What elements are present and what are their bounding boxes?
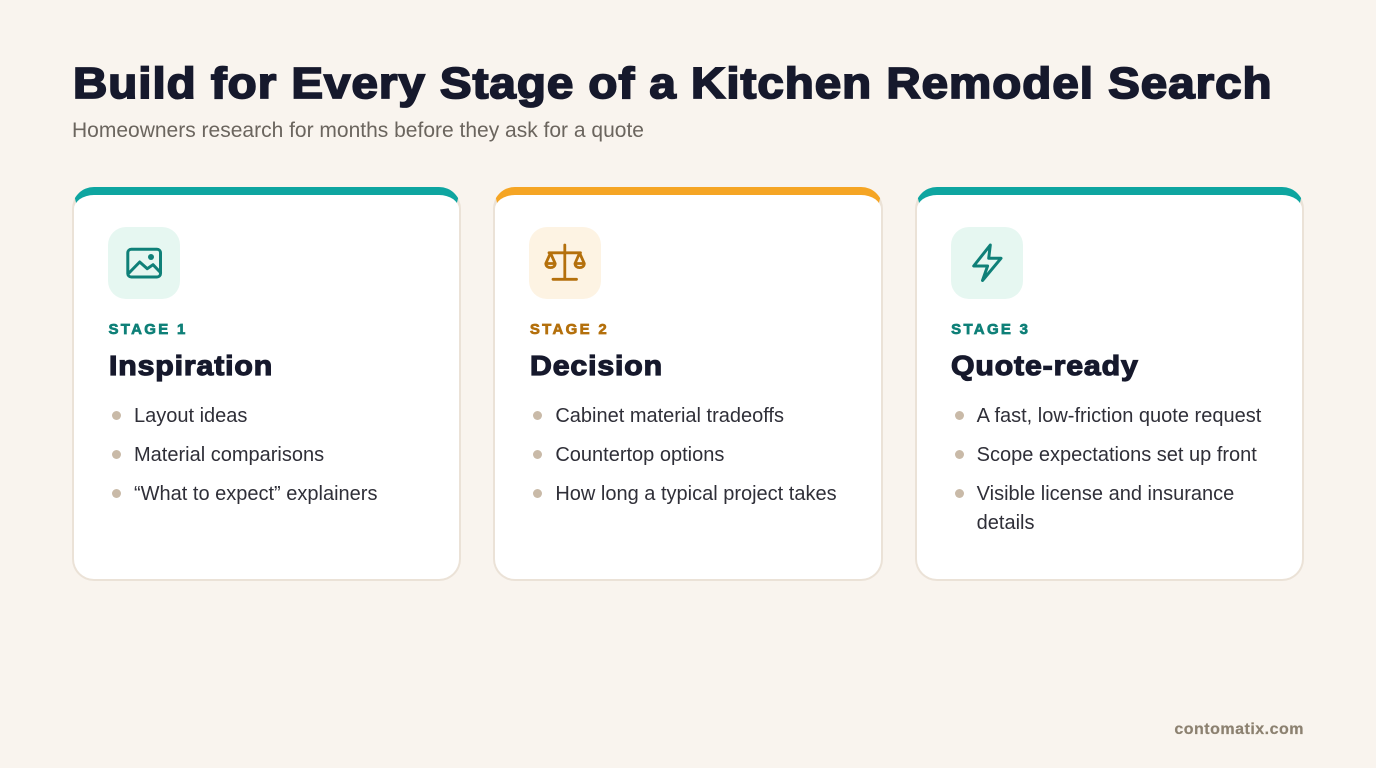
bullet list: “What to expect” explainers: [134, 483, 377, 505]
bullet list: Cabinet material tradeoffs: [555, 405, 784, 427]
bullet list: [955, 405, 1262, 534]
stage label: STAGE 2: [530, 321, 609, 338]
stage heading: Quote-ready: [951, 350, 1139, 381]
bullet list: How long a typical project takes: [555, 483, 837, 505]
panel: stage 3 quote-ready: [915, 187, 1304, 581]
stage heading: Inspiration: [108, 350, 273, 381]
stage label: STAGE 1: [108, 321, 188, 338]
bullet list: Layout ideas: [134, 405, 247, 427]
stage heading: Decision: [530, 350, 663, 381]
bullet list: Material comparisons: [134, 444, 324, 466]
brand footer: contomatix.com: [1174, 721, 1304, 738]
bullet list: A fast, low-friction quote request: [977, 405, 1261, 427]
bullet list: Scope expectations set up front: [977, 444, 1257, 466]
bullet list: Visible license and insurance details: [977, 483, 1234, 534]
panel: stage 2 decision: [493, 187, 883, 581]
stage label: STAGE 3: [951, 321, 1030, 338]
icon: scales: [529, 227, 601, 299]
icon: lightning bolt: [951, 227, 1023, 299]
title: Build for Every Stage of a Kitchen Remodel Search: [73, 58, 1273, 108]
bullet list: [112, 405, 377, 505]
bullet list: [533, 405, 837, 505]
bullet list: Countertop options: [555, 444, 724, 466]
panel: stage 1 inspiration: [72, 187, 461, 581]
subtitle: Homeowners research for months before they ask for a quote: [72, 119, 644, 142]
icon: image: [108, 227, 180, 299]
